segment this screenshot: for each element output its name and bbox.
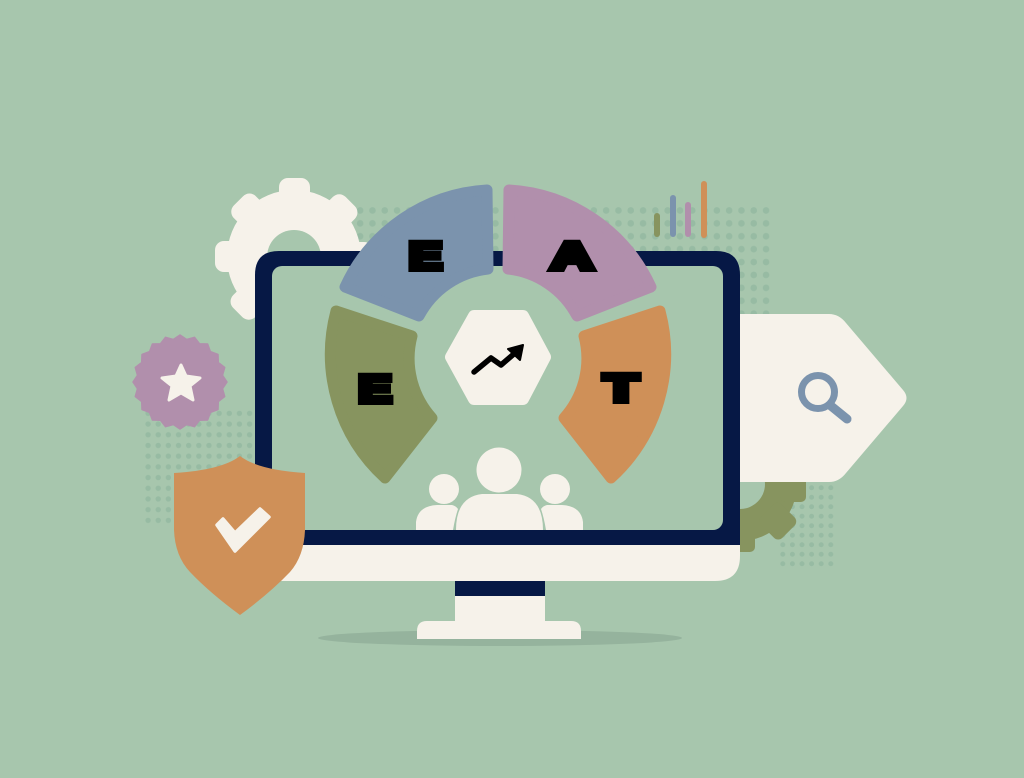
monitor shadow	[318, 630, 682, 646]
icon: magnifying glass	[802, 376, 847, 419]
dot pattern: bottom right	[778, 483, 836, 569]
monitor frame	[255, 251, 740, 545]
panel: E segment (olive)	[330, 311, 432, 478]
icon: white gear	[215, 178, 373, 336]
monitor stand	[417, 578, 581, 639]
center hexagon with growth arrow	[451, 316, 545, 399]
icon: olive gear	[683, 427, 806, 552]
monitor screen	[272, 266, 723, 530]
badge: star	[133, 335, 227, 429]
dot pattern: left	[143, 408, 254, 525]
panel: A segment (purple)	[508, 190, 651, 316]
dot pattern: top	[354, 204, 772, 314]
search tag	[735, 314, 906, 482]
panel: E segment (blue)	[345, 190, 488, 316]
panel: T segment (orange): T	[604, 368, 638, 410]
panel: E segment (olive): E	[358, 369, 392, 411]
monitor	[255, 251, 740, 646]
icon: people group	[416, 448, 583, 530]
panel: E segment (blue): E	[409, 236, 442, 278]
shield with check mark	[174, 456, 305, 615]
monitor chin	[255, 540, 740, 581]
bar chart	[654, 181, 707, 238]
panel: A segment (purple): A	[551, 236, 593, 278]
panel: T segment (orange)	[564, 311, 666, 478]
icon: growth arrow	[474, 345, 523, 372]
